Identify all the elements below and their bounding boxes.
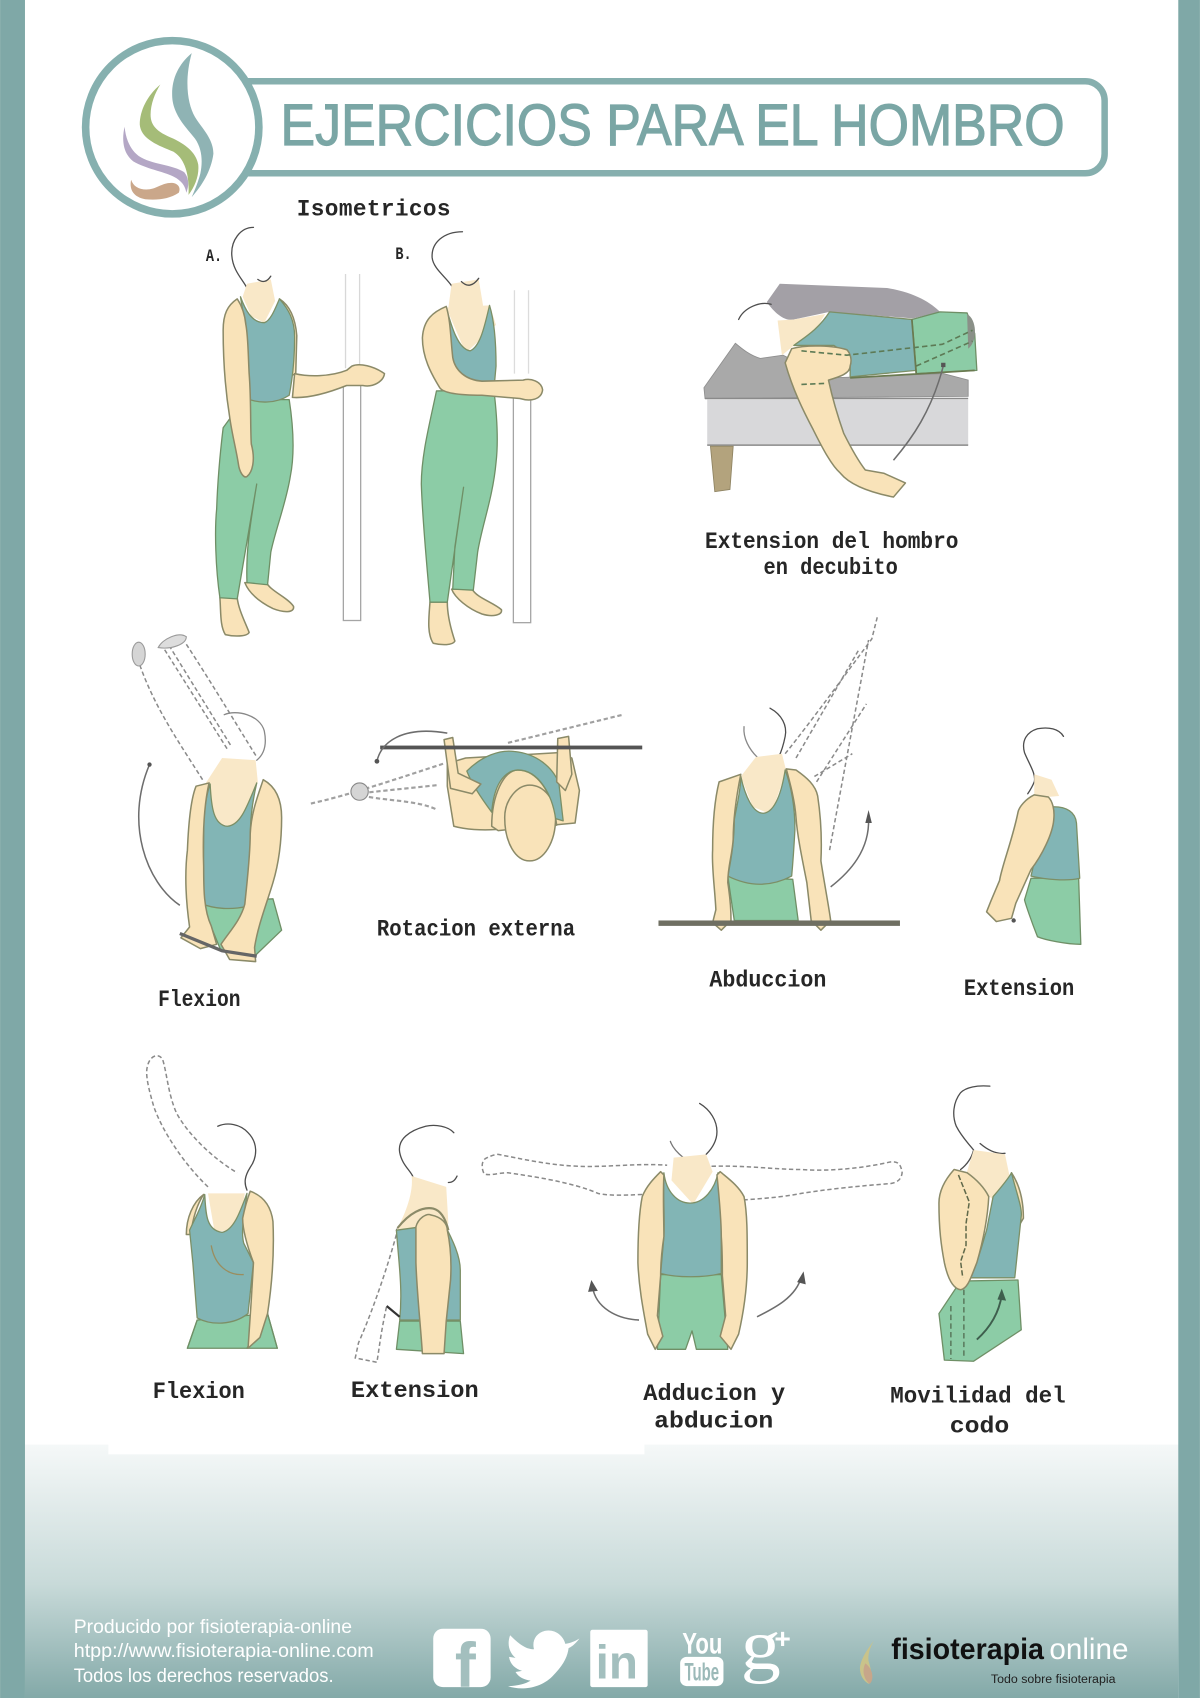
icon: linkedin: in <box>596 1637 638 1690</box>
icon: facebook <box>433 1629 491 1698</box>
brand logo: online <box>1049 1634 1128 1666</box>
icon: google plus: + <box>774 1623 791 1654</box>
heading: isometricos: Isometricos <box>297 196 451 222</box>
brand logo: fisioterapia <box>891 1634 1045 1666</box>
label: adducion y abducion: abducion <box>654 1408 773 1434</box>
figure A: isometric <box>216 227 385 636</box>
icon: youtube: Tube <box>684 1659 719 1687</box>
figure: abduction <box>658 617 900 930</box>
label: extension del hombro: en decubito <box>764 555 898 581</box>
figure: adduction and abduction <box>482 1103 902 1349</box>
title: EJERCICIOS PARA EL HOMBRO <box>281 93 1065 158</box>
icon: youtube <box>680 1629 723 1687</box>
left side bar <box>0 0 25 1698</box>
figure: extension row three <box>355 1125 464 1362</box>
footer credits text: Todos los derechos reservados. <box>74 1665 334 1687</box>
label: B: B. <box>395 246 412 265</box>
label: abduccion: Abduccion <box>709 968 826 994</box>
label: extension del hombro: Extension del hombro <box>705 529 958 555</box>
label: movilidad del codo: codo <box>950 1414 1009 1440</box>
label: flexion: Flexion <box>153 1379 245 1405</box>
icon: twitter <box>508 1630 579 1688</box>
footer credits text <box>74 1616 374 1687</box>
brand logo <box>860 1634 1128 1686</box>
figure B: isometric <box>421 232 543 645</box>
label: adducion y abducion: Adducion y <box>643 1381 786 1407</box>
footer credits text: Producido por fisioterapia-online <box>74 1616 352 1638</box>
icon: linkedin <box>590 1630 648 1690</box>
figure: shoulder extension on bed <box>704 284 977 497</box>
label: extension del hombro <box>705 529 958 581</box>
post A <box>343 274 361 621</box>
post B <box>513 290 531 623</box>
logo circle <box>86 41 259 214</box>
label: flexion: Flexion <box>158 987 240 1013</box>
figure: flexion row three <box>147 1056 277 1348</box>
figure: external rotation <box>311 715 642 861</box>
label: adducion y abducion <box>643 1381 786 1434</box>
label: movilidad del codo: Movilidad del <box>890 1383 1066 1409</box>
footer gradient band <box>25 1445 1178 1698</box>
right side bar <box>1178 0 1200 1698</box>
label: extension: Extension <box>964 976 1074 1002</box>
icon: google plus: g <box>741 1606 781 1685</box>
icon: youtube: You <box>682 1629 722 1661</box>
figure: extension side view <box>987 728 1081 944</box>
footer credits text: htpp://www.fisioterapia-online.com <box>74 1640 374 1662</box>
label: A: A. <box>206 248 222 267</box>
label: extension: Extension <box>351 1378 479 1404</box>
title box <box>217 81 1105 173</box>
figure: flexion with bar <box>132 635 282 962</box>
brand logo: Todo sobre fisioterapia <box>991 1672 1116 1686</box>
figure: elbow mobility <box>939 1086 1023 1361</box>
label: rotacion externa: Rotacion externa <box>377 917 575 943</box>
label: movilidad del codo <box>890 1383 1066 1440</box>
